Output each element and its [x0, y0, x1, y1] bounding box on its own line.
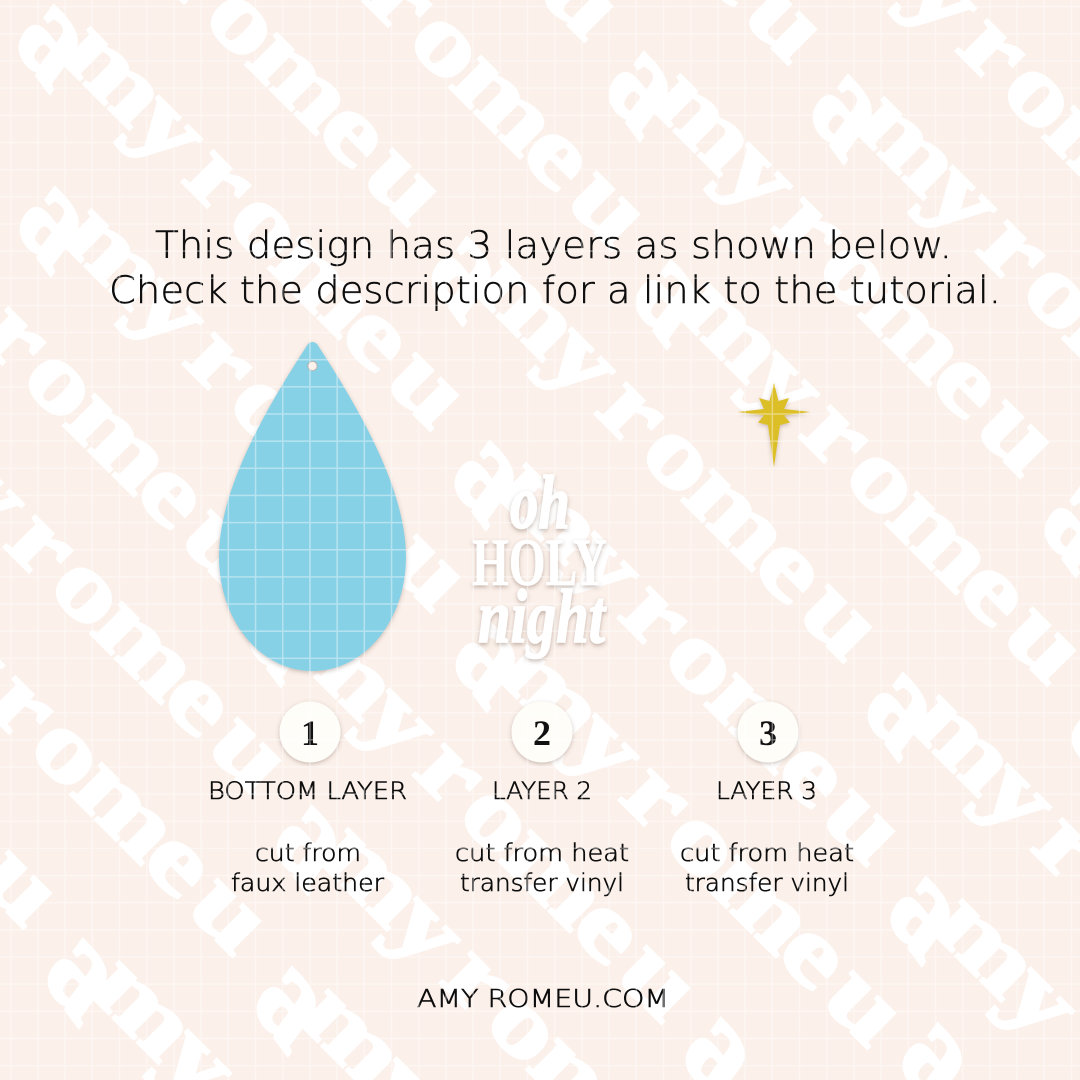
number badge 1 — [280, 702, 340, 762]
number badge 2: 2 — [533, 713, 551, 753]
title: Check the description for a link to the tutorial. — [109, 269, 1001, 312]
layer 2 caption: cut from heat — [455, 839, 629, 867]
text: my romeu — [42, 0, 492, 448]
text: a — [26, 887, 147, 1051]
layer 3 caption: cut from heat — [680, 839, 854, 867]
layer 1 caption: cut from — [255, 839, 361, 867]
text: a — [0, 135, 119, 299]
footer website: AMY ROMEU.COM — [417, 984, 669, 1013]
text: a — [434, 571, 555, 735]
layer 2: oh holy night lettering: oh — [510, 461, 570, 545]
text: my romeu — [478, 433, 928, 884]
text: my romeu — [273, 590, 723, 1041]
layer 2: oh holy night lettering: HOLY — [472, 524, 607, 600]
layer 2: oh holy night lettering — [472, 461, 607, 659]
text: my romeu — [632, 44, 1080, 495]
text: my romeu — [479, 615, 929, 1066]
title — [109, 224, 1001, 312]
text: a — [410, 185, 531, 349]
layer 3 caption: LAYER 3 — [716, 777, 817, 805]
number badge 3 — [738, 702, 798, 762]
layer 2 caption: LAYER 2 — [492, 777, 592, 805]
number badge 2 — [512, 702, 572, 762]
text: a — [869, 825, 990, 989]
text: a — [791, 23, 912, 187]
layer 1 caption: faux leather — [231, 869, 384, 897]
text: a — [587, 0, 708, 164]
text: my romeu — [43, 179, 493, 630]
layer 1 caption: BOTTOM LAYER — [208, 777, 407, 805]
text: a — [235, 915, 356, 1079]
layer 3 caption: transfer vinyl — [685, 869, 849, 897]
number badge 3: 3 — [759, 713, 777, 753]
text: a — [846, 621, 967, 785]
layer 2 caption — [455, 777, 629, 897]
layer 1 caption — [208, 777, 407, 897]
text: my romeu — [455, 229, 905, 680]
layer 2: oh holy night lettering: night — [478, 575, 607, 659]
layer 3: gold star — [738, 383, 810, 467]
layer 3 caption — [680, 777, 854, 897]
text: a — [255, 754, 376, 918]
layer 1: teardrop earring base — [219, 342, 406, 671]
text: a — [228, 546, 349, 710]
text: a — [614, 208, 735, 372]
title: This design has 3 layers as shown below. — [155, 224, 952, 267]
number badge 1: 1 — [301, 713, 319, 753]
layer 2 caption: transfer vinyl — [460, 869, 624, 897]
text: a — [433, 389, 554, 553]
